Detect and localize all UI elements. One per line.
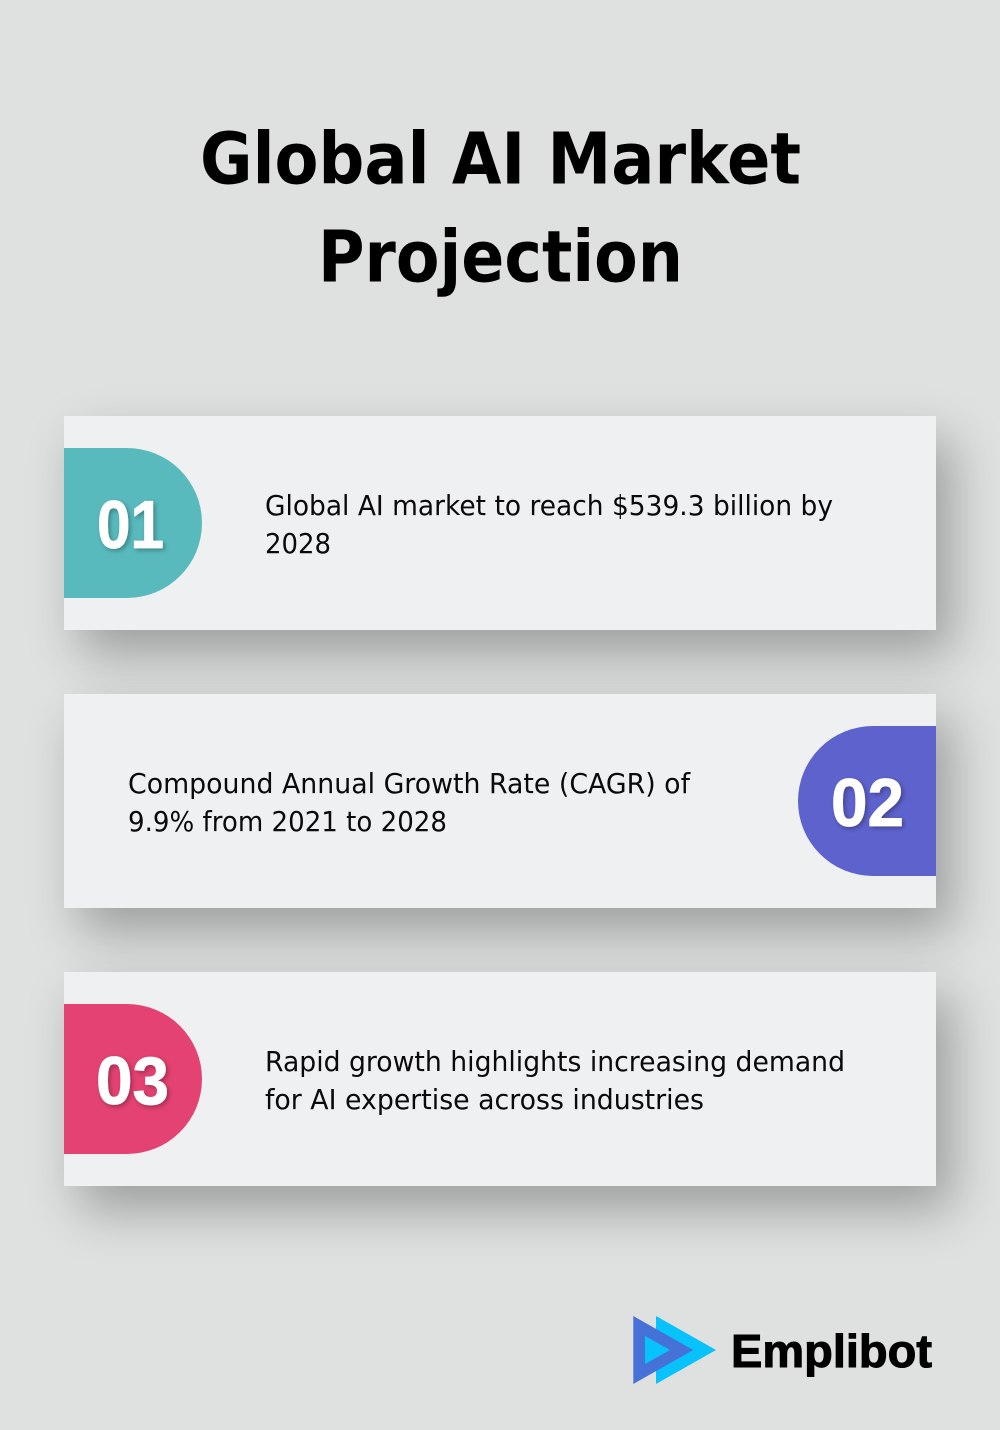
text: card 1: Global AI market to reach $539.3 billion by bbox=[265, 489, 833, 522]
card 3 background bbox=[64, 972, 936, 1186]
badge 01 bbox=[64, 448, 202, 598]
title: Global AI Market bbox=[200, 118, 801, 200]
text: card 3: for AI expertise across industries bbox=[265, 1083, 704, 1116]
icon: play triangles bbox=[633, 1316, 716, 1384]
wordmark: Emplibot bbox=[731, 1325, 932, 1377]
text: card 2: Compound Annual Growth Rate (CAGR) of bbox=[128, 767, 691, 800]
text: card 3: Rapid growth highlights increasing demand bbox=[265, 1045, 845, 1078]
title bbox=[200, 118, 801, 298]
badge 02: 02 bbox=[831, 765, 904, 841]
badge 02 bbox=[798, 726, 936, 876]
card 2 background bbox=[64, 694, 936, 908]
text: card 2 bbox=[128, 767, 691, 838]
text: card 2: 9.9% from 2021 to 2028 bbox=[128, 805, 447, 838]
text: card 1: 2028 bbox=[265, 527, 331, 560]
badge 03 bbox=[64, 1004, 202, 1154]
logo: Emplibot bbox=[633, 1316, 932, 1384]
card 1 background bbox=[64, 416, 936, 630]
text: card 3 bbox=[265, 1045, 845, 1116]
text: card 1 bbox=[265, 489, 833, 560]
title: Projection bbox=[318, 216, 683, 298]
badge 03: 03 bbox=[96, 1043, 169, 1119]
badge 01: 01 bbox=[97, 487, 164, 563]
